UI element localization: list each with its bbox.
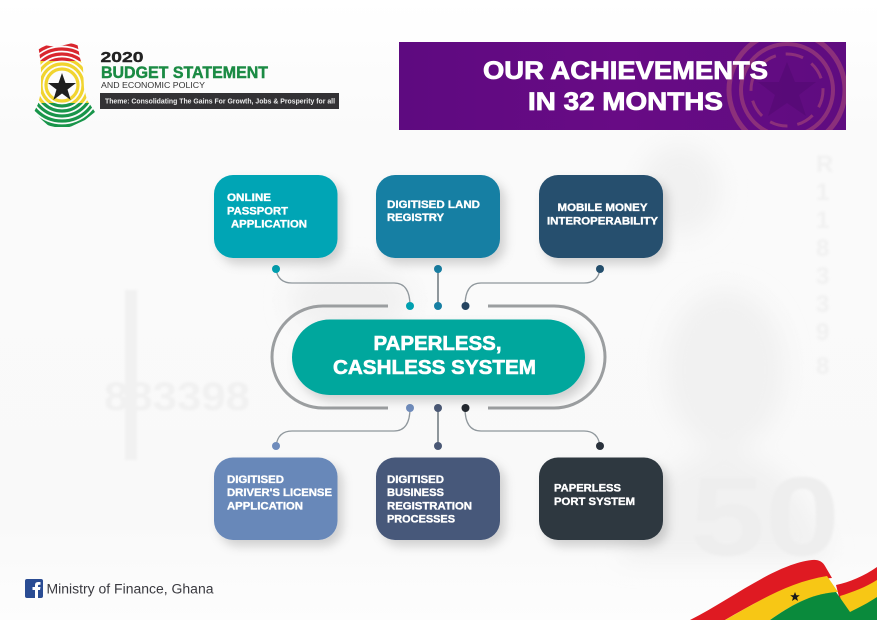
theme bar: Theme: Consolidating The Gains For Growth, Jobs & Prosperity for all — [105, 96, 335, 106]
background watermark: 3 — [816, 291, 829, 318]
central pill: paperless, cashless system: PAPERLESS, — [374, 333, 502, 355]
panel: title banner — [399, 42, 846, 130]
logo heading text: 2020 — [100, 49, 144, 66]
card: digitised business registration processes: PROCESSES — [387, 514, 455, 526]
card: digitised business registration processes: BUSINESS — [387, 487, 444, 499]
central pill: paperless, cashless system — [292, 320, 585, 395]
card: digitised driver's license application: DIGITISED — [227, 474, 284, 486]
card: paperless port system: PORT SYSTEM — [554, 496, 635, 508]
card: mobile money interoperability: MOBILE MONEY — [558, 202, 648, 214]
background watermark: 1 — [816, 207, 829, 234]
outer ring around central pill — [272, 306, 605, 408]
panel: title banner: IN 32 MONTHS — [528, 88, 723, 116]
background watermark: 3 — [816, 263, 829, 290]
background watermark: 8 — [816, 235, 829, 262]
connectors: top — [276, 269, 600, 306]
card: digitised business registration processes: DIGITISED — [387, 474, 444, 486]
card: paperless port system: PAPERLESS — [554, 482, 621, 494]
logo: Ghana map emblem — [34, 43, 95, 127]
icon: facebook — [25, 579, 43, 598]
card: digitised land registry — [376, 175, 500, 258]
background watermark: 1 — [816, 179, 829, 206]
card: online passport application: ONLINE — [227, 192, 271, 204]
Ghana flag ribbon — [690, 560, 877, 620]
banner emblem — [726, 42, 846, 130]
background watermark: 50 — [690, 454, 840, 579]
card: mobile money interoperability: INTEROPERABILITY — [547, 216, 659, 228]
logo star — [48, 73, 76, 100]
card: digitised driver's license application: DRIVER'S LICENSE — [227, 487, 332, 499]
theme bar — [100, 93, 339, 109]
card: digitised driver's license application — [214, 458, 338, 540]
card: digitised driver's license application: APPLICATION — [227, 500, 303, 512]
card: online passport application: PASSPORT — [227, 206, 288, 218]
logo heading text: BUDGET STATEMENT — [101, 64, 268, 82]
title text: OUR ACHIEVEMENTS — [483, 57, 768, 85]
card: digitised business registration processes: REGISTRATION — [387, 500, 472, 512]
card: paperless port system — [539, 458, 663, 540]
card: online passport application: APPLICATION — [231, 218, 307, 230]
background watermark: R — [816, 151, 833, 178]
flag star — [790, 592, 800, 601]
footer: ministry of finance: Ministry of Finance, Ghana — [46, 582, 214, 596]
central pill: paperless, cashless system: CASHLESS SYSTEM — [333, 357, 536, 379]
card: digitised land registry: DIGITISED LAND — [387, 199, 480, 211]
connectors: bottom — [276, 408, 600, 446]
background watermark: 9 — [816, 319, 829, 346]
background watermark: 883398 — [104, 375, 250, 419]
logo heading text: AND ECONOMIC POLICY — [101, 80, 205, 90]
background watermark: 8 — [816, 353, 829, 380]
logo heading text — [100, 49, 268, 90]
card: online passport application — [214, 175, 338, 258]
card: digitised business registration processes — [376, 458, 500, 540]
card: mobile money interoperability — [539, 175, 663, 258]
card: digitised land registry: REGISTRY — [387, 212, 445, 224]
connector dots — [272, 265, 604, 450]
